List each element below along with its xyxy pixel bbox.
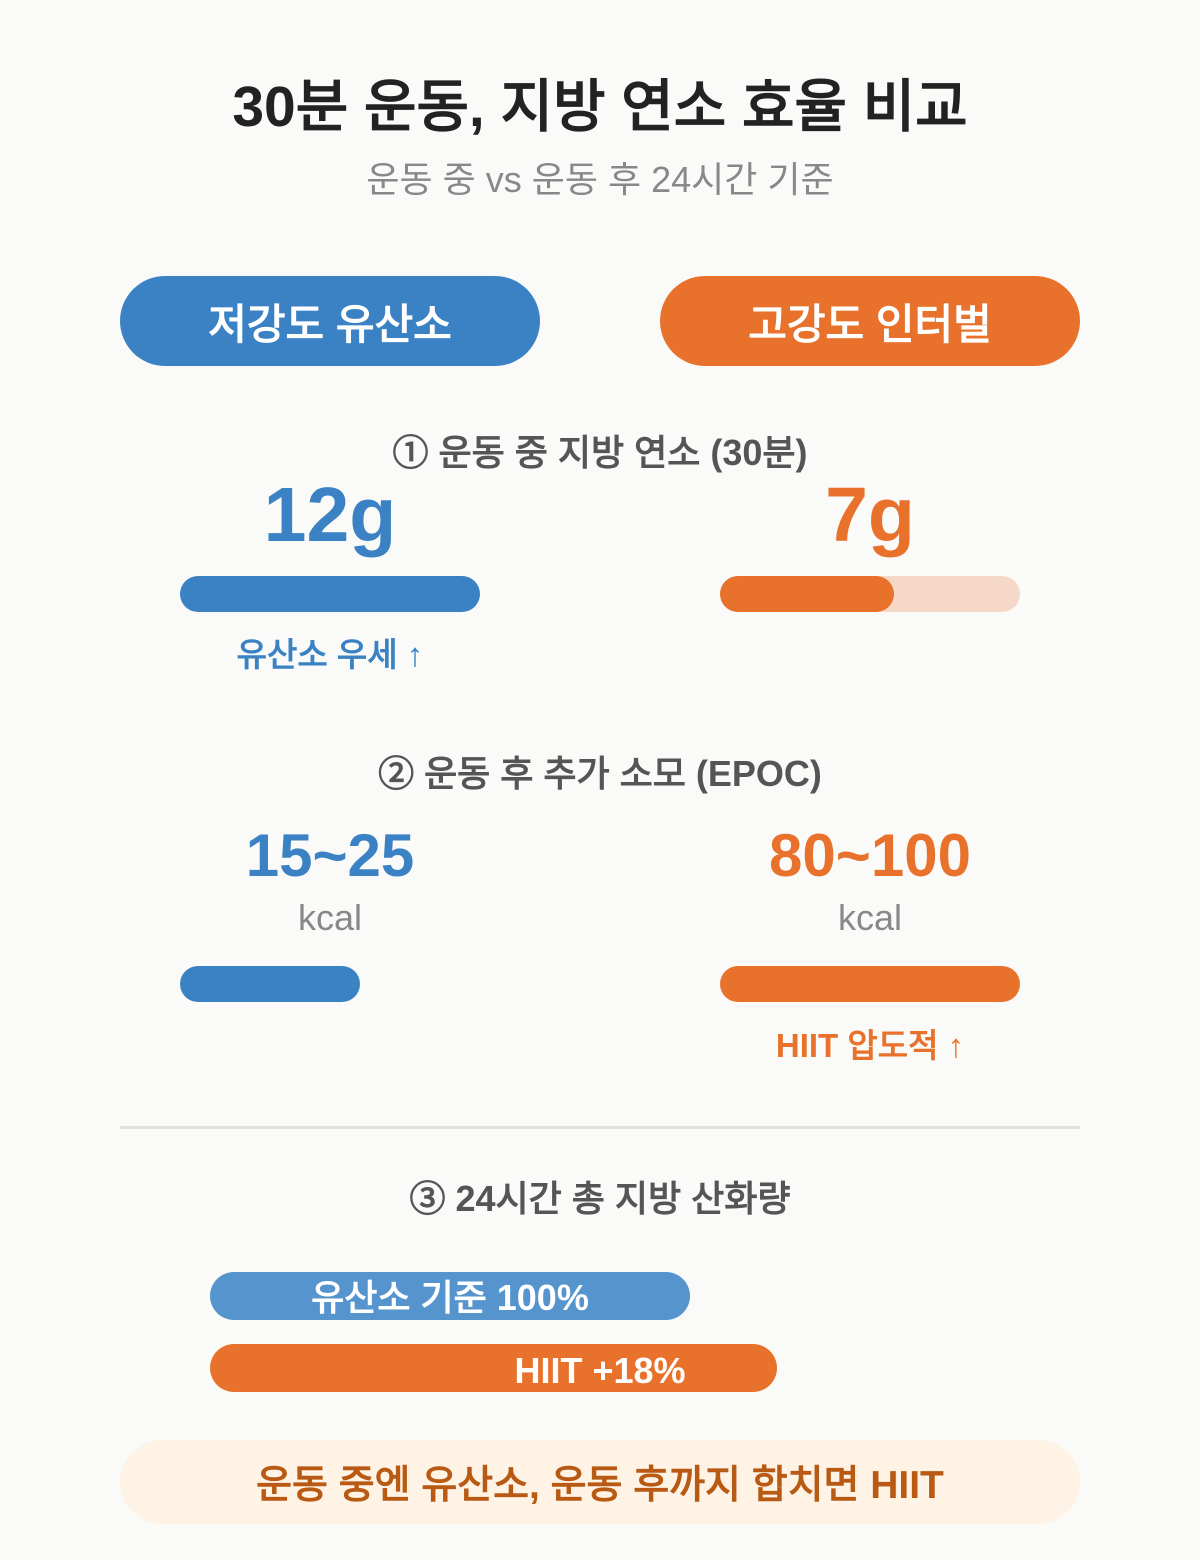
section 3: HIIT bar — [210, 1344, 777, 1392]
section 2: HIIT unit: kcal — [838, 897, 902, 938]
badge: high-intensity interval — [660, 276, 1080, 366]
section 2: HIIT bar — [720, 966, 1020, 1002]
section 1: winner note: 유산소 우세 ↑ — [237, 636, 423, 673]
section 3: aerobic bar: 유산소 기준 100% — [311, 1277, 589, 1318]
section 1: HIIT bar — [720, 576, 1020, 612]
section 1: HIIT value: 7g — [825, 472, 915, 558]
badge: low-intensity aerobic: 저강도 유산소 — [208, 301, 452, 348]
section 2: aerobic bar — [180, 966, 360, 1002]
badge: high-intensity interval: 고강도 인터벌 — [748, 301, 992, 348]
section 1: aerobic bar — [180, 576, 480, 612]
subtitle: 운동 중 vs 운동 후 24시간 기준 — [366, 159, 834, 200]
title: 30분 운동, 지방 연소 효율 비교 — [232, 75, 968, 139]
section 3: aerobic bar — [210, 1272, 690, 1320]
section 2: aerobic unit: kcal — [298, 897, 362, 938]
section 1: aerobic value: 12g — [264, 472, 396, 558]
section 2: HIIT value: 80~100 — [769, 822, 971, 889]
section 1 heading: ① 운동 중 지방 연소 (30분) — [392, 432, 808, 473]
conclusion callout: 운동 중엔 유산소, 운동 후까지 합치면 HIIT — [256, 1464, 944, 1507]
section 3: HIIT bar: HIIT +18% — [514, 1350, 686, 1391]
conclusion callout — [120, 1440, 1080, 1524]
section 2: aerobic value: 15~25 — [246, 822, 414, 889]
badge: low-intensity aerobic — [120, 276, 540, 366]
section 2: winner note: HIIT 압도적 ↑ — [776, 1027, 964, 1064]
section 2 heading: ② 운동 후 추가 소모 (EPOC) — [378, 753, 822, 794]
section 3 heading: ③ 24시간 총 지방 산화량 — [409, 1178, 790, 1219]
